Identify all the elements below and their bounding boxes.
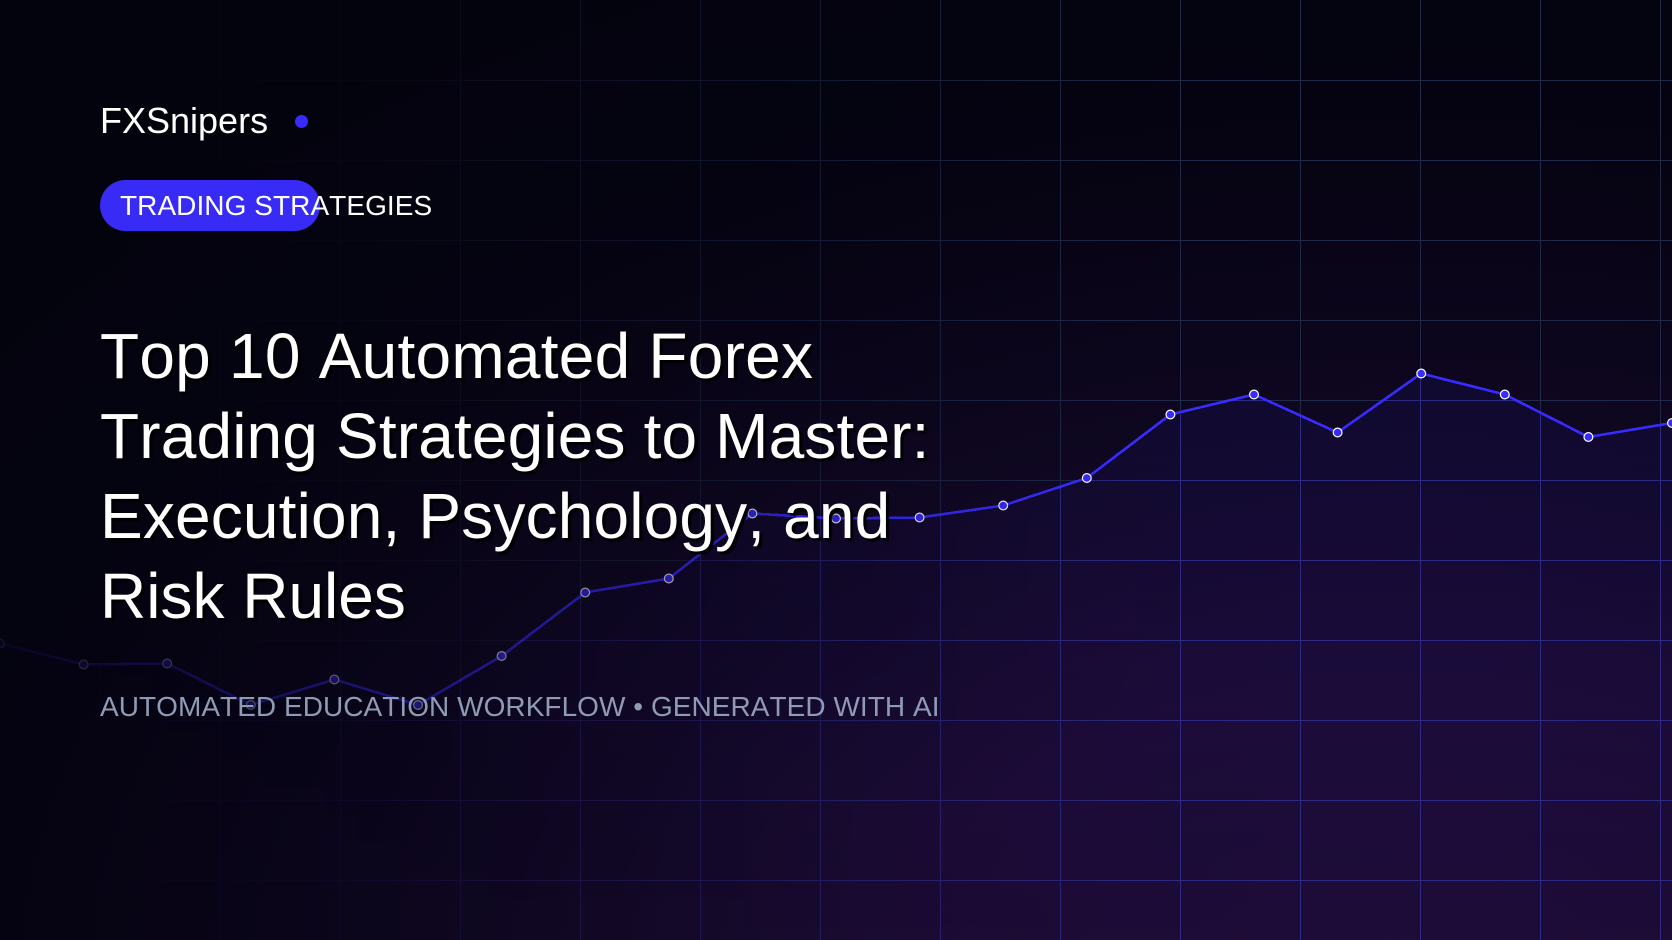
subtitle: AUTOMATED EDUCATION WORKFLOW • GENERATED WITH AI	[100, 691, 940, 722]
title: Execution, Psychology, and	[100, 480, 890, 552]
title: Top 10 Automated Forex	[100, 320, 813, 392]
category badge text: TRADING STRATEGIES	[120, 190, 432, 221]
icon: brand dot	[295, 115, 308, 128]
brand name: FXSnipers	[100, 100, 268, 141]
price line	[0, 374, 1672, 705]
category badge pill	[100, 180, 320, 231]
title: Trading Strategies to Master:	[100, 400, 930, 472]
data points	[0, 369, 1672, 709]
line chart	[0, 368, 1672, 710]
title	[100, 320, 930, 632]
title: Risk Rules	[100, 560, 406, 632]
